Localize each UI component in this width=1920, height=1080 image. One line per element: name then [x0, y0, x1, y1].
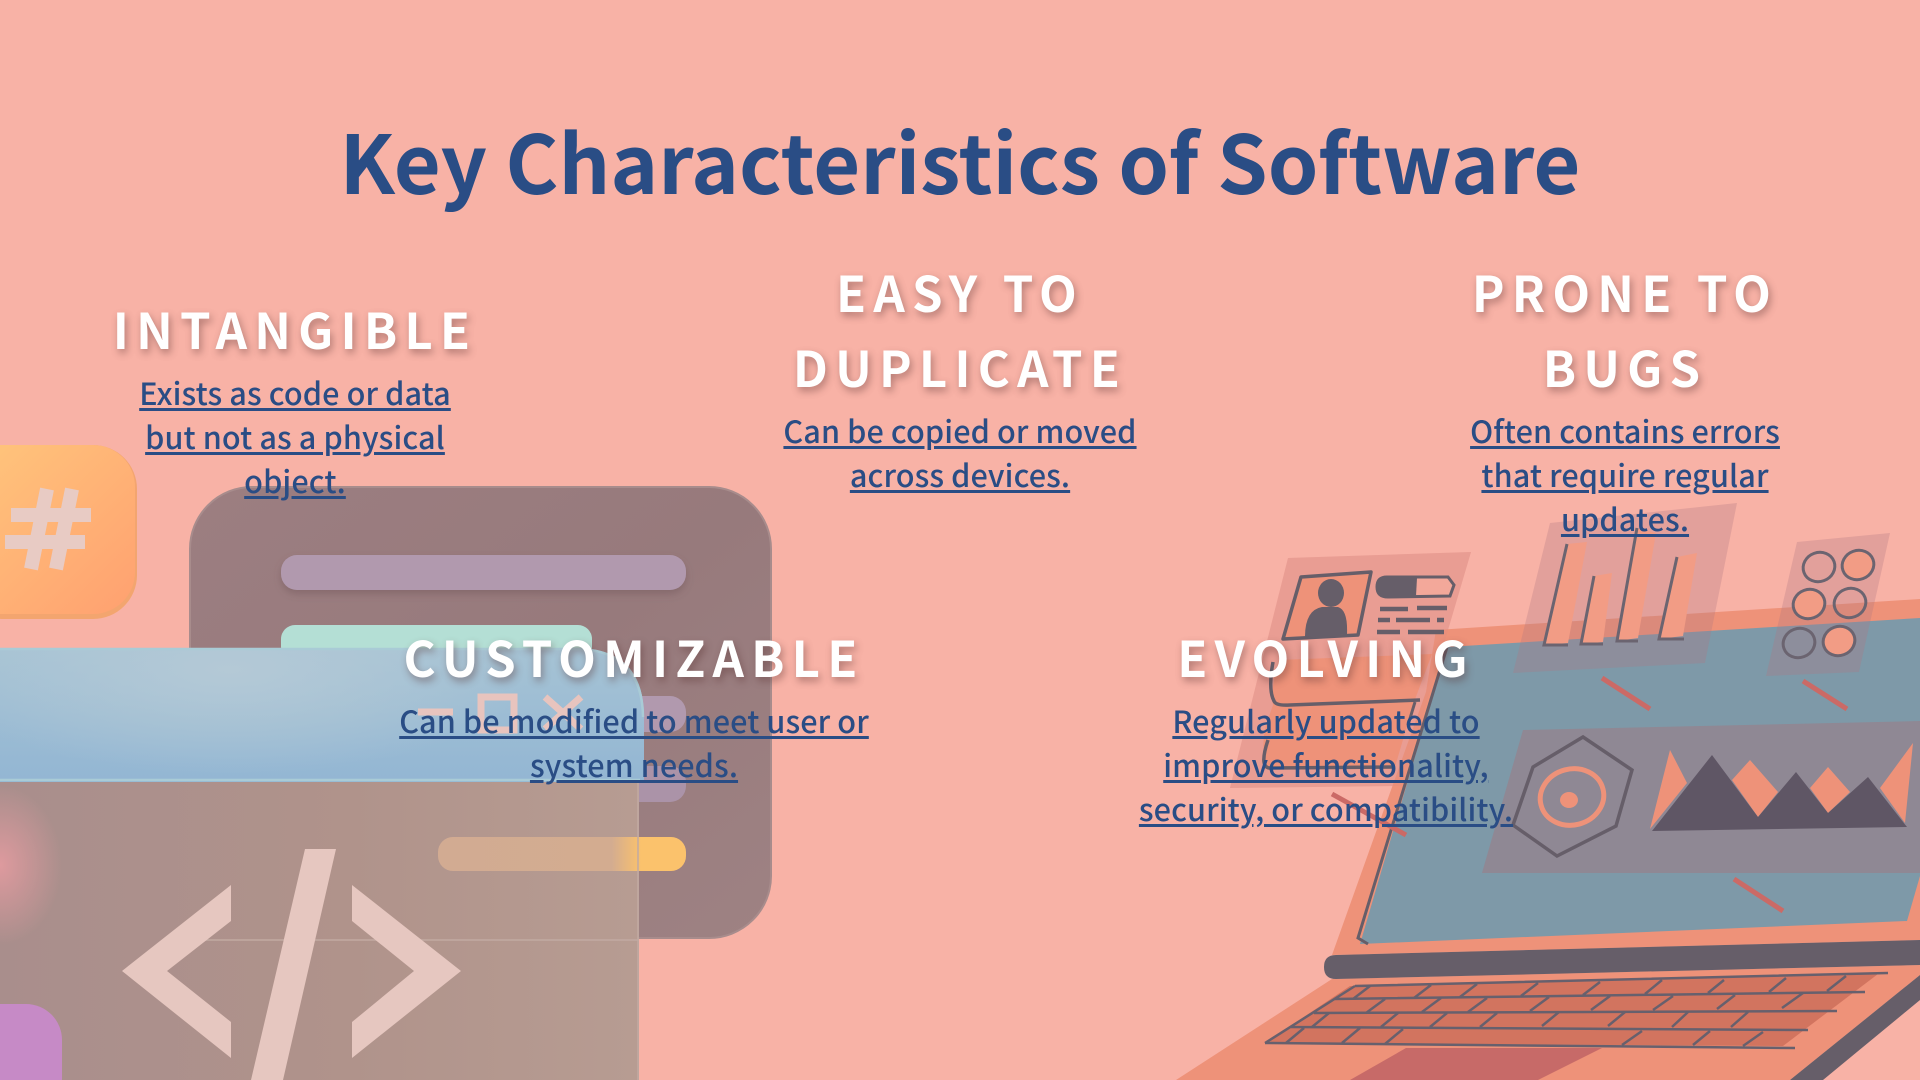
title: Key Characteristics of Software: [340, 101, 1580, 218]
red tick marks: [1332, 678, 1847, 911]
icon: code brackets: [122, 849, 461, 1080]
profile card contents: [1230, 552, 1471, 788]
heading: prone to bugs: PRONE TO: [1472, 256, 1778, 327]
text: easy to duplicate description: Can be copied or moved: [783, 408, 1137, 452]
panel: blue window title bar: [0, 648, 644, 782]
panel: screen dashboard: [1482, 721, 1920, 873]
panel: circles card: [1766, 533, 1890, 676]
text: intangible description: Exists as code or data: [139, 370, 451, 414]
text: customizable description: system needs.: [530, 742, 738, 786]
heading: prone to bugs: [1472, 256, 1778, 402]
icon: mountain chart: [1650, 743, 1913, 831]
panel: dark code panel: [190, 487, 771, 938]
text: evolving description: security, or compatibility.: [1139, 786, 1513, 830]
block: prone to bugs: [1470, 256, 1780, 540]
text: evolving description: [1138, 698, 1514, 830]
text: evolving description: Regularly updated to: [1172, 698, 1480, 742]
text: customizable description: Can be modified to meet user or: [399, 698, 869, 742]
block: intangible: [113, 293, 477, 502]
heading: evolving: EVOLVING: [1177, 621, 1475, 692]
text: intangible description: but not as a physical: [145, 414, 445, 458]
panel: bar chart card: [1513, 503, 1737, 673]
icon: purple tile: [0, 1004, 62, 1080]
text: intangible description: [139, 370, 451, 502]
heading: customizable: CUSTOMIZABLE: [403, 621, 865, 692]
laptop screen: [1360, 618, 1920, 944]
laptop hinge: [1324, 940, 1920, 979]
text: prone to bugs description: updates.: [1561, 496, 1689, 540]
text: prone to bugs description: that require regular: [1481, 452, 1769, 496]
panel: profile card: [1230, 552, 1471, 788]
laptop body: [1332, 599, 1920, 955]
laptop illustration: [1176, 503, 1920, 1080]
block: evolving: [1138, 621, 1514, 830]
block: easy to duplicate: [783, 256, 1137, 496]
icon: pink glow: [0, 785, 62, 945]
text: easy to duplicate description: across devices.: [850, 452, 1070, 496]
text: evolving description: improve functionality,: [1163, 742, 1489, 786]
keyboard deck: [1176, 965, 1920, 1080]
text: intangible description: object.: [244, 458, 346, 502]
heading: easy to duplicate: [793, 256, 1127, 402]
text: customizable description: [399, 698, 869, 786]
icon: hexagon target: [1513, 737, 1632, 856]
heading: easy to duplicate: DUPLICATE: [793, 330, 1127, 402]
heading: intangible: INTANGIBLE: [113, 293, 477, 364]
block: customizable: [399, 621, 869, 786]
icon: orange hash tile: [0, 445, 137, 619]
heading: easy to duplicate: EASY TO: [836, 256, 1084, 327]
panel: glass code window: [0, 782, 686, 1080]
text: easy to duplicate description: [783, 408, 1137, 496]
text: prone to bugs description: [1470, 408, 1780, 540]
text: prone to bugs description: Often contains errors: [1470, 408, 1780, 452]
heading: prone to bugs: BUGS: [1543, 330, 1707, 402]
